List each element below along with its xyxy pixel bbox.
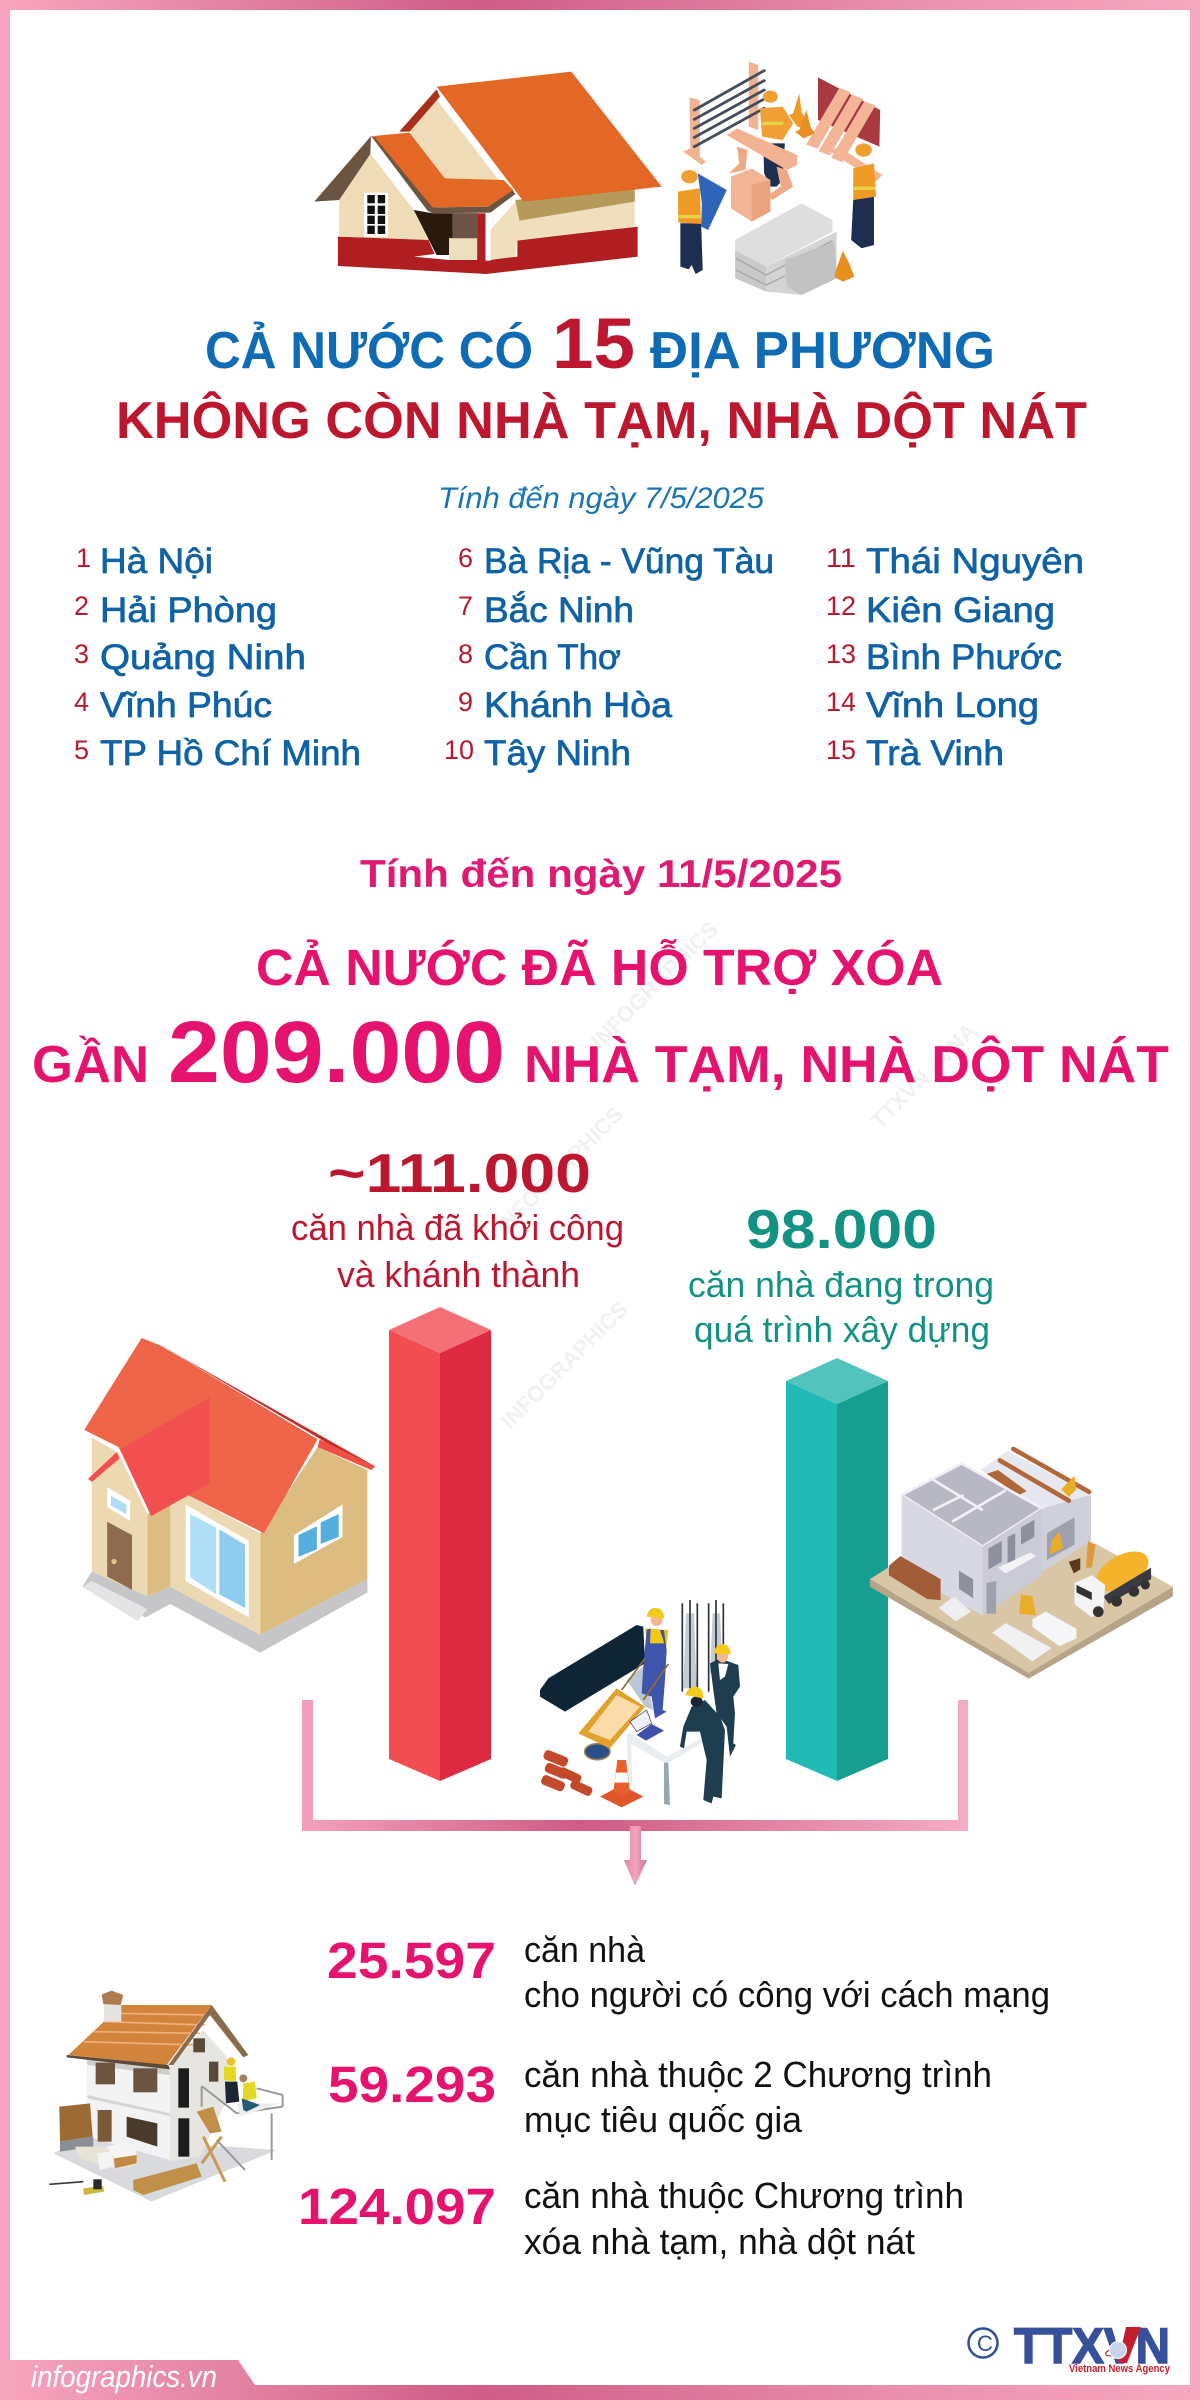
stat row: 124.097 [298,2175,964,2262]
headline line 2 [32,1004,1169,1101]
stat: 98.000 under construction: quá trình xây dựng [694,1309,990,1350]
column 3: Vĩnh Long [866,686,1039,725]
list of 15 localities [74,542,1084,773]
headline line 2: GẦN [32,1035,149,1094]
stat: 98.000 under construction: căn nhà đang trong [688,1264,994,1305]
column 2: Tây Ninh [484,734,631,773]
logo: copyright TTXVN: C [977,2331,993,2356]
column 1: 1 [76,543,91,573]
stat: 111.000 completed: ~111.000 [328,1142,591,1204]
column 1: Quảng Ninh [100,638,306,677]
column 1: 5 [74,735,89,765]
column 1: 3 [74,639,89,669]
headline line 1: CẢ NƯỚC ĐÃ HỖ TRỢ XÓA [256,938,943,996]
stat row: 59.293: căn nhà thuộc 2 Chương trình [524,2054,992,2095]
column 1: Hải Phòng [100,591,277,630]
stat row: 124.097: xóa nhà tạm, nhà dột nát [524,2221,915,2262]
stat row: 25.597 [327,1929,1050,2015]
logo: copyright TTXVN: TTXVN [1014,2318,1170,2374]
headline: total support [32,938,1169,1101]
stat row: 25.597: căn nhà [524,1929,646,1970]
red bar [389,1307,491,1781]
column 2: Bắc Ninh [484,591,634,630]
column 2 [444,542,774,773]
column 2: 9 [458,687,473,717]
column 2: 8 [458,639,473,669]
column 2: 7 [458,591,473,621]
date note 7/5/2025: Tính đến ngày 7/5/2025 [438,482,764,515]
column 2: 10 [444,735,474,765]
column 2: Khánh Hòa [484,686,673,725]
column 1: TP Hồ Chí Minh [100,734,361,773]
column 3: Thái Nguyên [866,542,1084,581]
stat: 111.000 completed [291,1142,624,1295]
watermarks: INFOGRAPHICS [496,1297,633,1434]
stat row: 25.597: cho người có công với cách mạng [524,1974,1050,2015]
stat: 111.000 completed: căn nhà đã khởi công [291,1207,624,1248]
column 1: 4 [74,687,89,717]
title line 1: ĐỊA PHƯƠNG [650,322,995,380]
watermarks: INFOGRAPHICS [586,917,723,1054]
column 1: 2 [74,591,89,621]
column 3: 13 [826,639,856,669]
illustration: two-storey house with roofers [49,1991,283,2202]
footer tab [0,2359,255,2400]
headline line 2: NHÀ TẠM, NHÀ DỘT NÁT [524,1035,1169,1094]
stat: 111.000 completed: và khánh thành [337,1254,580,1295]
column 3: Kiên Giang [866,591,1055,630]
illustration: construction workers with materials [678,62,882,295]
stat row: 124.097: căn nhà thuộc Chương trình [524,2175,964,2216]
column 3: Trà Vinh [866,734,1004,773]
illustration: finished house [82,1338,375,1653]
stat: 98.000 under construction: 98.000 [746,1198,937,1260]
column 3: 14 [826,687,856,717]
arrow down [624,1826,647,1886]
footer site name: infographics.vn [31,2359,217,2394]
column 2: Bà Rịa - Vũng Tàu [484,542,774,581]
watermarks: TTXVN - VNA [866,1018,981,1134]
column 3: 12 [826,591,856,621]
bracket connector [302,1700,968,1831]
headline line 2: 209.000 [168,1004,505,1101]
title line 1 [205,305,995,384]
column 1: Hà Nội [100,542,213,581]
stat row: 59.293 [328,2054,992,2140]
stat: 98.000 under construction [688,1198,994,1350]
title line 1: 15 [552,305,635,384]
column 3: Bình Phước [866,638,1062,677]
stat row: 59.293: 59.293 [328,2056,496,2113]
illustration: house under construction [870,1449,1173,1679]
breakdown stats [298,1929,1050,2262]
column 1 [74,542,361,773]
column 3: 11 [826,543,856,573]
date heading 11/5/2025: Tính đến ngày 11/5/2025 [360,853,842,896]
column 1: Vĩnh Phúc [100,686,272,725]
column 2: 6 [458,543,473,573]
teal bar [786,1358,888,1781]
watermarks [491,917,981,1434]
illustration: workers, wheelbarrow and bricks [540,1600,740,1807]
watermarks: INFOGRAPHICS [491,1102,628,1239]
title line 1: CẢ NƯỚC CÓ [205,321,533,380]
stat row: 124.097: 124.097 [298,2178,496,2235]
title block [116,305,1087,450]
logo: copyright TTXVN: Vietnam News Agency [1069,2363,1171,2375]
column 3 [826,542,1084,773]
stat row: 25.597: 25.597 [327,1932,496,1989]
title line 2: KHÔNG CÒN NHÀ TẠM, NHÀ DỘT NÁT [116,391,1087,450]
illustration: damaged house with orange roof [314,72,662,274]
stat row: 59.293: mục tiêu quốc gia [524,2099,803,2140]
column 2: Cần Thơ [484,638,621,677]
column 3: 15 [826,735,856,765]
